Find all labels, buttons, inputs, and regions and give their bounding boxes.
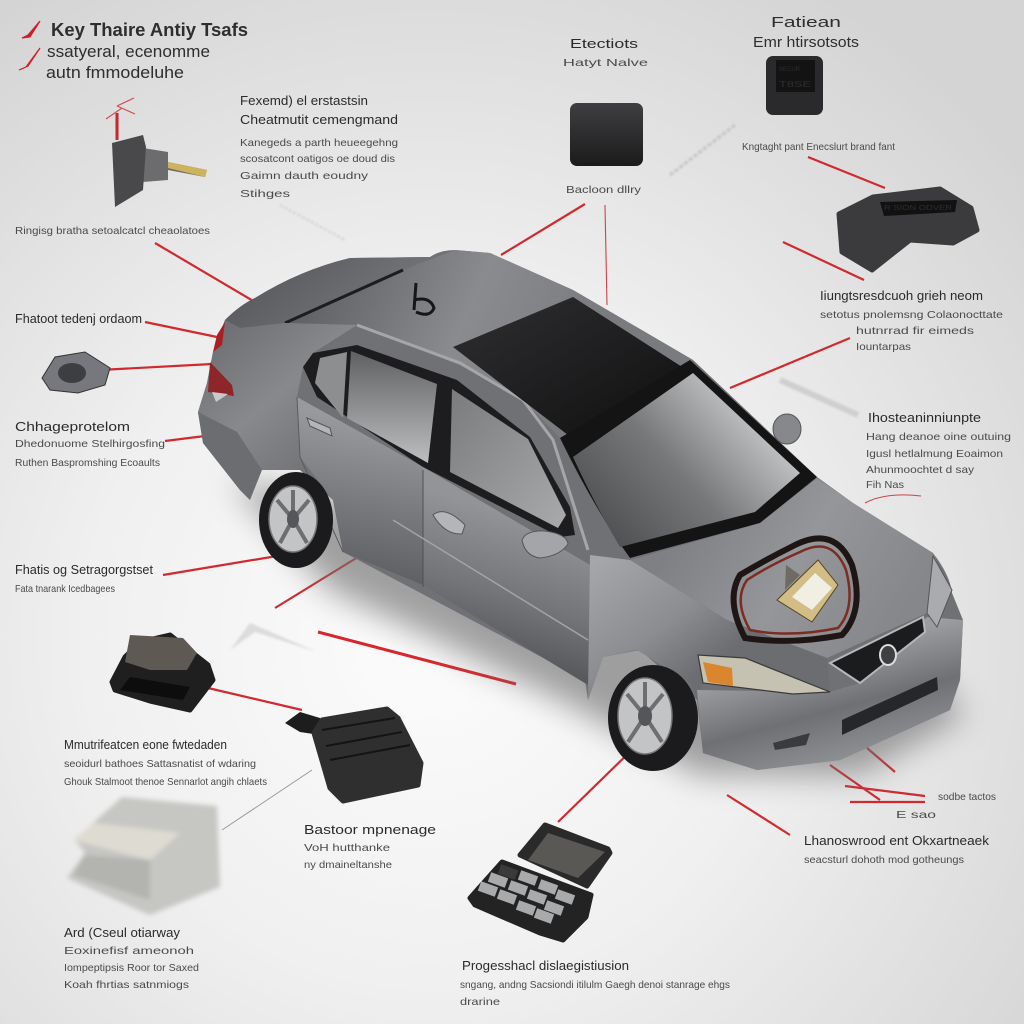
text: keypad callout: Progesshacl dislaegistiusion — [462, 959, 629, 973]
text: keypad callout: sngang, andng Sacsiondi itilulm Gaegh denoi stanrage ehgs — [460, 979, 730, 991]
text: top-centre label — [563, 37, 648, 69]
front fender — [588, 555, 830, 700]
text: right callout lower: Igusl hetlalmung Eoaimon — [866, 448, 1003, 460]
icon: small control unit — [766, 56, 823, 115]
front bumper — [697, 617, 963, 770]
side window frame — [303, 345, 575, 537]
windshield frame — [560, 360, 817, 558]
text: keypad callout: drarine — [460, 996, 500, 1008]
text: box caption: Bacloon dllry — [566, 184, 642, 196]
text: right callout lower: Hang deanoe oine outuing — [866, 431, 1011, 443]
rear quarter panel — [198, 320, 357, 500]
text: bottom-right callout: E sao — [896, 809, 936, 821]
title block: autn fmmodeluhe — [46, 63, 184, 82]
text: pouch callout: ny dmaineltanshe — [304, 859, 392, 871]
icon: small control unit: SECUR — [779, 67, 801, 73]
text: top-left callout: scosatcont oatigos oe doud dis — [240, 153, 395, 165]
icon: keypad handset — [470, 825, 610, 940]
icon: small control unit: T8SE — [779, 80, 811, 89]
text: faded module callout: Koah fhrtias satnmiogs — [64, 979, 189, 991]
honda badge — [880, 645, 896, 665]
roof — [285, 250, 693, 438]
lower intake — [842, 677, 938, 735]
wiring harness module — [734, 538, 857, 641]
door seams and creases — [297, 325, 588, 640]
text: faded module callout: Iompeptipsis Roor tor Saxed — [64, 962, 199, 974]
trunk lid — [225, 257, 430, 328]
red callout lines — [100, 157, 925, 835]
text: faded module callout — [64, 926, 199, 991]
text: fob callout: Chhageprotelom — [15, 420, 130, 434]
text: keypad callout — [460, 959, 730, 1008]
text: right callout lower: Ihosteaninniunpte — [868, 411, 981, 425]
icon: receiver device: R SION ODVER — [884, 205, 952, 212]
grille — [830, 617, 925, 683]
car body silhouette — [198, 250, 963, 770]
keypad keys — [478, 864, 575, 924]
text: side label — [15, 563, 154, 595]
antenna icon on roof — [414, 283, 434, 314]
rear door — [297, 397, 423, 585]
text: device caption: Kngtaght pant Enecslurt brand fant — [742, 141, 895, 153]
text: right callout upper: Iiungtsresdcuoh grieh neom — [820, 289, 983, 303]
front wheel — [608, 665, 698, 771]
front side window — [450, 389, 566, 528]
text: top-left callout: Kanegeds a parth heueegehng — [240, 137, 398, 149]
rear glass seam — [285, 270, 403, 323]
text: scanner callout: seoidurl bathoes Sattasnatist of wdaring — [64, 758, 256, 770]
icon: ribbed pouch — [285, 709, 421, 801]
icon: key and fob — [106, 98, 207, 207]
text: faded module callout: Ard (Cseul otiarway — [64, 926, 181, 940]
text: top-centre label: Etectiots — [570, 37, 638, 51]
right headlight — [927, 556, 952, 627]
text: top-centre label: Hatyt Nalve — [563, 57, 648, 69]
text: top-left callout: Fexemd) el erstastsin — [240, 94, 368, 108]
tail lights — [208, 322, 234, 402]
text: right callout lower: Ahunmoochtet d say — [866, 464, 975, 476]
text: right callout upper: hutnrrad fir eimeds — [856, 325, 974, 337]
rear quarter glass — [315, 352, 347, 418]
text: bottom-right callout — [804, 791, 996, 866]
text: top-left callout: Gaimn dauth eoudny — [240, 170, 369, 182]
text: scanner callout — [64, 738, 267, 788]
text: top-left callout: Stihges — [240, 188, 290, 200]
icon: faded module — [67, 797, 220, 915]
text: right callout upper — [820, 289, 1003, 353]
title block — [19, 20, 248, 82]
text: top-right label: Emr htirsotsots — [753, 34, 859, 51]
text: side label: Fata tnarank Icedbagees — [15, 583, 115, 595]
hood — [630, 478, 938, 658]
text: pouch callout: VoH hutthanke — [304, 842, 390, 854]
icon: black scanner device — [112, 635, 213, 710]
rear wheel — [259, 472, 333, 568]
text: bottom-right callout: Lhanoswrood ent Okxartneaek — [804, 834, 990, 848]
text: right callout upper: Iountarpas — [856, 341, 911, 353]
car ground shadow — [230, 480, 965, 775]
text: scanner callout: Ghouk Stalmoot thenoe Sennarlot angih chlaets — [64, 776, 267, 788]
far mirror — [773, 414, 801, 444]
text: key caption: Ringisg bratha setoalcatcl cheaolatoes — [15, 225, 210, 237]
front door — [423, 467, 590, 685]
text: scanner callout: Mmutrifeatcen eone fwtedaden — [64, 738, 227, 752]
text: right callout lower — [866, 411, 1011, 491]
text: top-right label: Fatiean — [771, 14, 841, 31]
text: top-left callout: Cheatmutit cemengmand — [240, 113, 398, 127]
icon: black box module — [570, 103, 643, 166]
near mirror — [522, 531, 568, 558]
car — [198, 250, 963, 771]
faint guide strips — [230, 125, 858, 652]
text: bottom-right callout: sodbe tactos — [938, 791, 996, 803]
rear bumper — [198, 412, 262, 500]
door handles — [307, 418, 465, 534]
text: faded module callout: Eoxinefisf ameonoh — [64, 945, 194, 957]
text: top-left callout — [240, 94, 398, 200]
fog vent — [773, 733, 810, 750]
text: top-right label — [753, 14, 859, 51]
headlight — [698, 655, 830, 694]
amber indicator — [703, 662, 733, 686]
icon: remote fob left — [42, 352, 110, 393]
icon: receiver device — [839, 189, 977, 270]
text: right callout lower: Fih Nas — [866, 479, 904, 491]
text: fob callout — [15, 420, 165, 469]
text: bottom-right callout: seacsturl dohoth mod gotheungs — [804, 854, 964, 866]
text: pouch callout: Bastoor mpnenage — [304, 823, 436, 837]
text: right callout upper: setotus pnolemsng Colaonocttate — [820, 309, 1003, 321]
rear side window — [347, 351, 437, 463]
text: pouch callout — [304, 823, 436, 871]
text: rear label: Fhatoot tedenj ordaom — [15, 312, 142, 326]
sunroof — [453, 297, 690, 435]
text: fob callout: Ruthen Baspromshing Ecoaults — [15, 457, 160, 469]
windshield — [573, 373, 800, 547]
title block: ssatyeral, ecenomme — [47, 42, 210, 61]
text: side label: Fhatis og Setragorgstset — [15, 563, 154, 577]
text: fob callout: Dhedonuome Stelhirgosfing — [15, 438, 165, 450]
title block: Key Thaire Antiy Tsafs — [51, 20, 248, 40]
